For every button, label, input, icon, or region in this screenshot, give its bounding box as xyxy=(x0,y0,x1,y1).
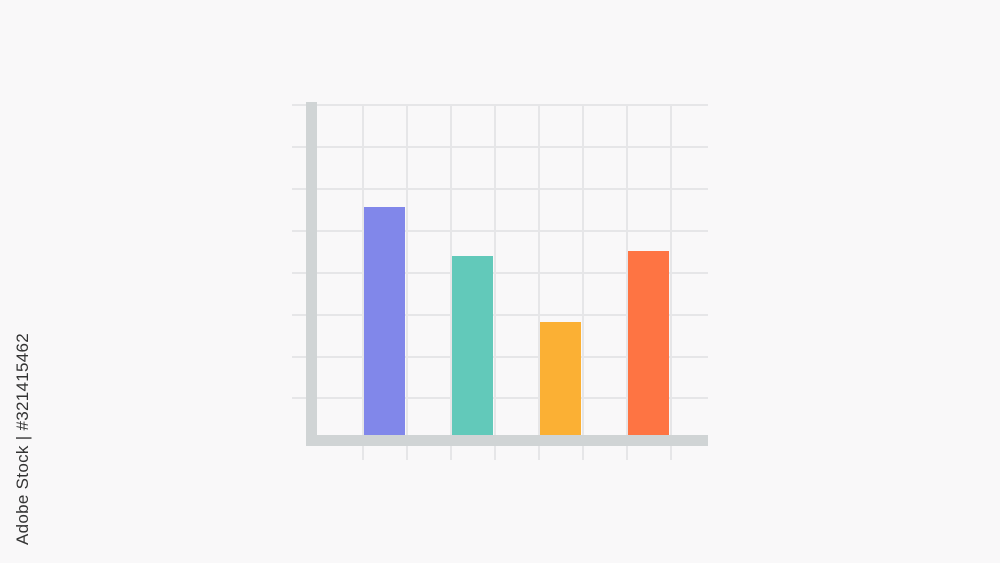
axes xyxy=(306,102,708,446)
bar: yellow xyxy=(540,322,581,435)
bar: teal xyxy=(452,256,493,435)
text: stock id: Adobe Stock | #321415462 xyxy=(13,333,32,545)
bar: purple xyxy=(364,207,405,435)
bar: orange xyxy=(628,251,669,435)
